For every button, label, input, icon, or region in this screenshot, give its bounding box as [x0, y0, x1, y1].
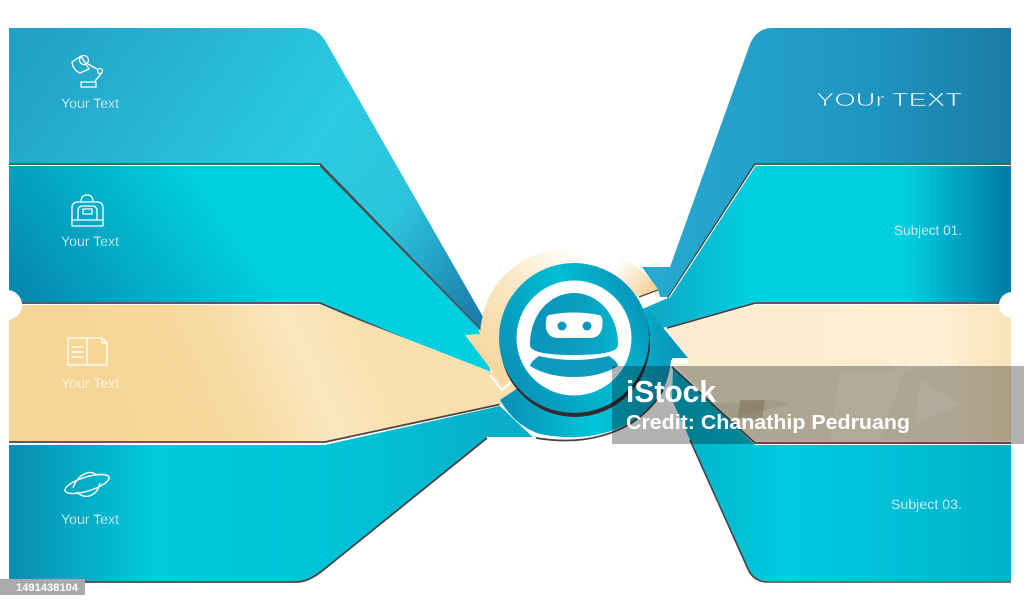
panel: left bottom: [9, 406, 536, 582]
panel: right top: [642, 28, 1011, 298]
panel: right second: [640, 166, 1011, 330]
panel: left cream: [9, 305, 525, 442]
side notches: [0, 290, 1024, 320]
icon: ringed planet: [63, 471, 111, 497]
icon: desk lamp: [72, 56, 102, 87]
icon: bag: [72, 195, 103, 226]
panel: left top: [9, 28, 486, 331]
label: your text 3: Your Text: [61, 376, 119, 391]
robot body: [530, 356, 618, 377]
arrow: cream arc: [465, 248, 660, 390]
robot eyes: [558, 322, 592, 330]
arrow: teal arc: [500, 308, 688, 441]
robot head: [530, 293, 618, 355]
icon: robot badge: [499, 263, 650, 417]
panel: right cream: [667, 305, 1011, 441]
icon: open book: [68, 338, 107, 365]
panel: right bottom: [672, 367, 1011, 582]
iStock wordmark: iStock: [626, 374, 717, 409]
watermark band: [612, 366, 1024, 444]
credit line: Credit: Chanathip Pedruang: [626, 411, 910, 434]
label: your text 4: Your Text: [61, 512, 119, 527]
label: your text 2: Your Text: [61, 234, 119, 249]
label: subject 01: Subject 01.: [894, 223, 962, 238]
image id stamp: 1491438104: [16, 582, 79, 594]
label: subject 02: Subject 02.: [891, 358, 962, 373]
image id stamp: [0, 579, 85, 595]
label: subject 03: Subject 03.: [891, 497, 962, 512]
label: your text heading: YOUr TEXT: [816, 90, 962, 110]
label: your text 1: Your Text: [61, 96, 119, 111]
robot visor: [546, 312, 603, 338]
panel: left second: [9, 166, 492, 376]
